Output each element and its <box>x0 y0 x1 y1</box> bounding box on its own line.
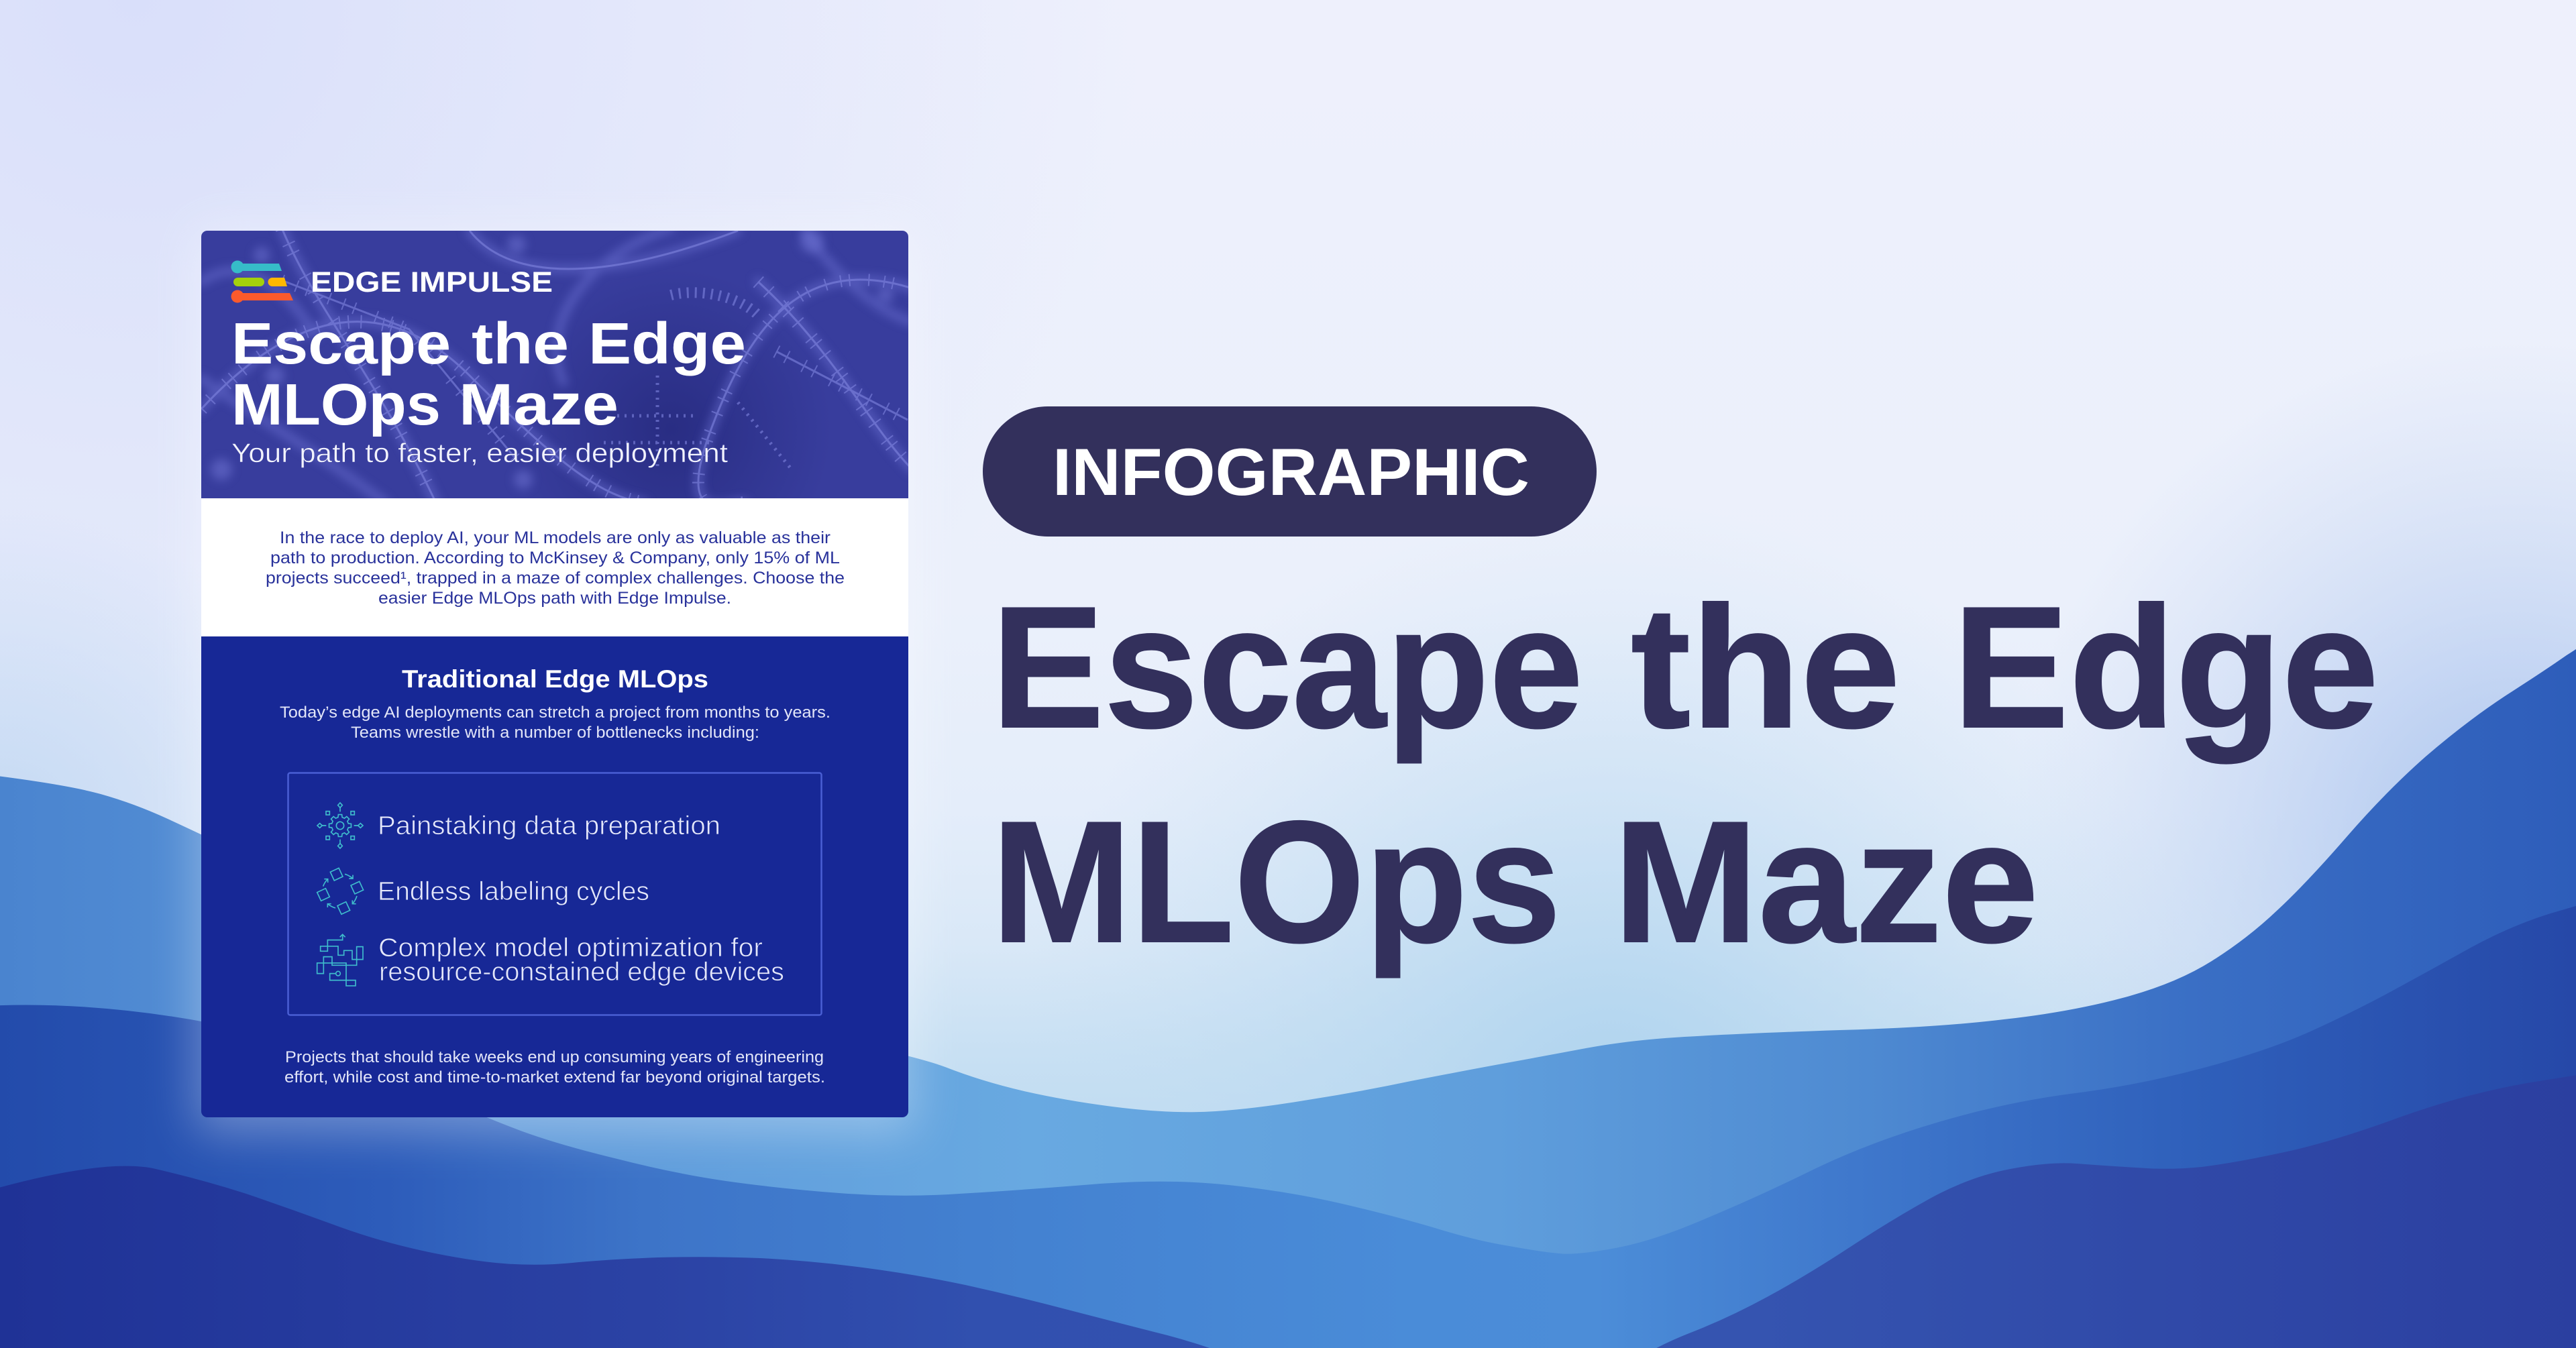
intro paragraph: easier Edge MLOps path with Edge Impulse. <box>378 589 731 608</box>
bottleneck box <box>288 773 821 1015</box>
intro paragraph: path to production. According to McKinsey & Company, only 15% of ML <box>270 549 840 567</box>
card title: Maze <box>459 372 619 437</box>
main title: Edge <box>1953 570 2379 765</box>
bottleneck label: model optimization <box>378 934 784 987</box>
main title: Maze <box>1613 785 2039 978</box>
icon: labeling cycle <box>317 868 364 914</box>
card title: Escape <box>231 311 451 376</box>
pill badge: INFOGRAPHIC <box>983 406 1597 537</box>
wave: front dark-blue layer <box>0 1073 2576 1348</box>
bottleneck label: labeling cycles: Endless labeling cycles <box>378 877 649 906</box>
bottleneck label: model optimization: resource-constained edge devices <box>379 958 784 987</box>
main title: Escape <box>991 570 1583 765</box>
main title: MLOps <box>991 785 1561 979</box>
main title: the <box>1631 570 1900 764</box>
card footer text: Projects that should take weeks end up consuming years of engineering <box>285 1048 824 1066</box>
section intro text: Today’s edge AI deployments can stretch a project from months to years. <box>280 704 830 722</box>
card footer text: effort, while cost and time-to-market extend far beyond original targets. <box>284 1068 825 1086</box>
card title: MLOps <box>231 372 441 437</box>
section intro text: Teams wrestle with a number of bottlenecks including: <box>351 724 759 742</box>
bottleneck label: model optimization: Complex model optimization for <box>378 934 763 962</box>
pill badge: INFOGRAPHIC: INFOGRAPHIC <box>1053 435 1529 509</box>
intro paragraph: projects succeed¹, trapped in a maze of complex challenges. Choose the <box>266 569 845 587</box>
card title: the <box>472 311 569 376</box>
card title: Edge <box>588 311 746 376</box>
card footer text <box>284 1048 825 1086</box>
main title <box>991 570 2379 979</box>
infographic card glow <box>195 228 915 1133</box>
logo: Edge Impulse mark <box>231 260 293 303</box>
wave: middle blue layer <box>0 902 2576 1348</box>
icon: gear with nodes <box>317 803 363 848</box>
section heading: Traditional Edge MLOps <box>402 665 708 693</box>
wave: back light-blue layer <box>0 640 2576 1348</box>
card subtitle: Your path to faster, easier deployment <box>231 439 728 468</box>
panel: traditional edge mlops section <box>201 636 908 1117</box>
intro paragraph <box>266 528 845 608</box>
panel: infographic card <box>201 228 912 1117</box>
icon: maze <box>317 934 363 986</box>
logo wordmark: EDGE IMPULSE <box>311 266 553 298</box>
panel: card header with circuit photo <box>201 228 912 506</box>
section intro text <box>280 704 830 742</box>
intro paragraph: In the race to deploy AI, your ML models are only as valuable as their <box>280 528 830 547</box>
card title <box>231 311 746 437</box>
bottleneck label: data preparation: Painstaking data preparation <box>378 811 720 840</box>
panel: intro white section <box>201 498 908 636</box>
